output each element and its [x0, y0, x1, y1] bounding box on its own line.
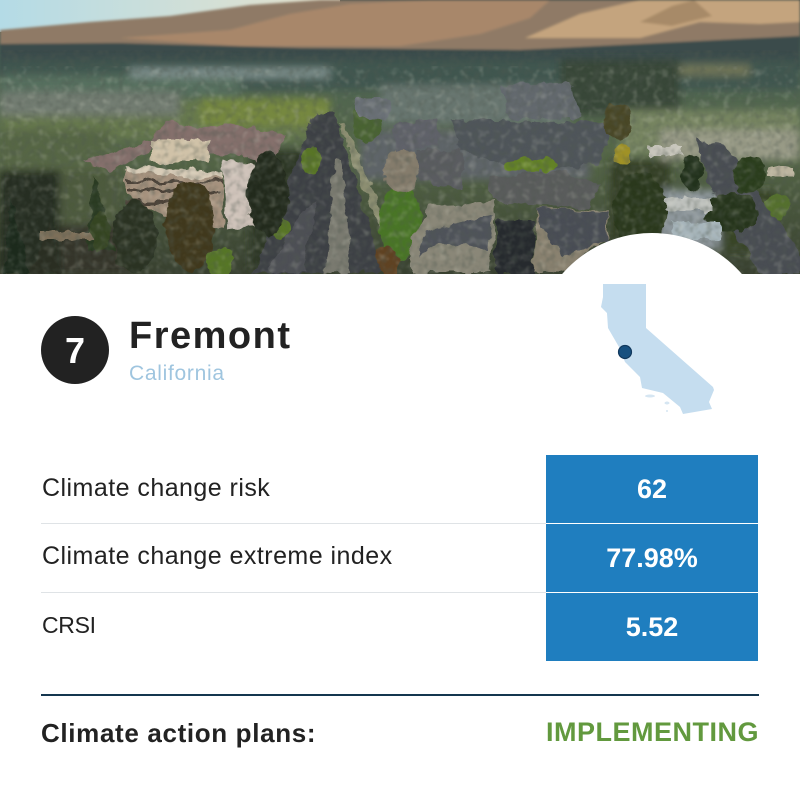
state shape: [601, 284, 714, 414]
value: climate change extreme index: [546, 524, 758, 592]
status: implementing: IMPLEMENTING: [546, 717, 759, 747]
trees left: [85, 175, 113, 250]
trees right: [613, 172, 667, 252]
value: CRSI: [546, 593, 758, 661]
title: city name: Fremont: [129, 315, 292, 357]
subtitle: state name: California: [129, 362, 225, 385]
location dot: [618, 346, 632, 358]
label: climate action plans: Climate action plans:: [41, 718, 316, 748]
value: climate change extreme index: 77.98%: [606, 543, 698, 573]
rank badge: 7: [65, 330, 85, 371]
apartment building: [124, 170, 222, 228]
value: CRSI: 5.52: [626, 612, 678, 642]
texture below the mountains: [0, 50, 800, 274]
central trees: [379, 186, 421, 262]
value: climate change risk: [546, 455, 758, 523]
photo: aerial view of Fremont: [0, 0, 800, 274]
island marks: [645, 394, 670, 412]
white circle behind state map: [562, 233, 742, 274]
label: climate change extreme index: Climate change extreme index: [42, 542, 393, 570]
houses: [412, 202, 494, 272]
value: climate change risk: 62: [637, 474, 667, 504]
pink complex: [85, 122, 285, 172]
road: [252, 112, 384, 274]
label: climate change risk: Climate change risk: [42, 474, 270, 502]
rank badge: [41, 316, 109, 384]
label: CRSI: CRSI: [42, 612, 96, 638]
icon: California state map with location dot: [601, 284, 714, 414]
